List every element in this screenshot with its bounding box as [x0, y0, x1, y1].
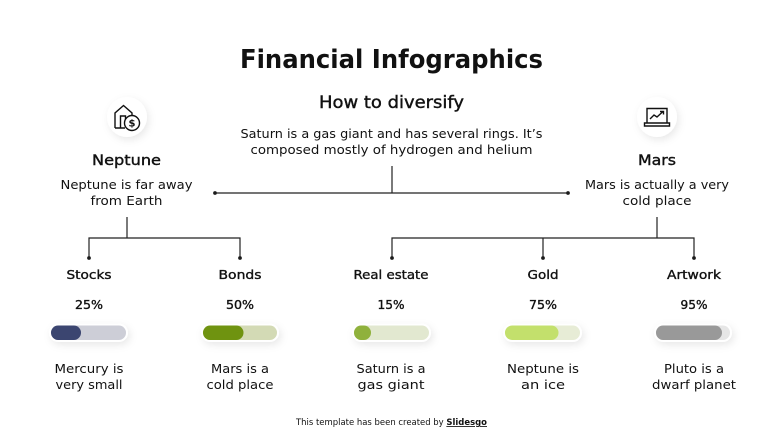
- credit line: This template has been created by Slidesgo: [295, 418, 487, 428]
- text: saturn description: composed mostly of hydrogen and helium: [250, 143, 532, 157]
- value: 15%: 15%: [378, 298, 404, 312]
- text: mercury: very small: [56, 378, 122, 392]
- icon: laptop with chart: [637, 97, 677, 137]
- panel: neptune: [60, 97, 192, 208]
- connector: top tree: [214, 166, 569, 194]
- text: neptune description: [60, 178, 192, 208]
- text: pluto: [652, 362, 736, 392]
- text: mars: [206, 362, 274, 392]
- column: real estate: [352, 268, 431, 392]
- text: neptune: [507, 362, 579, 392]
- label: bonds: Bonds: [218, 268, 262, 282]
- column: bonds: [201, 268, 279, 392]
- heading: mars: Mars: [638, 153, 676, 169]
- heading: neptune: Neptune: [92, 153, 161, 169]
- text: mars description: Mars is actually a very: [585, 178, 729, 192]
- text: saturn: gas giant: [358, 378, 425, 392]
- value: 75%: 75%: [529, 298, 557, 312]
- text: saturn: Saturn is a: [356, 362, 426, 376]
- column: artwork: [652, 268, 736, 392]
- text: saturn description: Saturn is a gas giant and has several rings. It’s: [240, 127, 542, 141]
- icon: house with dollar: $: [129, 118, 136, 130]
- column: stocks: [49, 268, 128, 392]
- text: neptune: Neptune is: [507, 362, 579, 376]
- panel: how to diversify: [240, 93, 542, 157]
- progress bar: 95%: [654, 324, 732, 342]
- title: Financial Infographics: [240, 45, 543, 75]
- value: 50%: 50%: [226, 298, 254, 312]
- label: gold: Gold: [528, 268, 558, 282]
- text: mercury: [54, 362, 124, 392]
- text: neptune description: Neptune is far away: [60, 178, 192, 192]
- value: 95%: 95%: [680, 298, 708, 312]
- text: mars: cold place: [206, 378, 274, 392]
- text: mars description: [585, 178, 729, 208]
- heading: how to diversify: How to diversify: [319, 93, 464, 112]
- column: gold: [503, 268, 582, 392]
- label: stocks: Stocks: [66, 268, 112, 282]
- label: real estate: Real estate: [354, 268, 428, 282]
- label: artwork: Artwork: [667, 268, 721, 282]
- text: mars: Mars is a: [211, 362, 269, 376]
- text: mars description: cold place: [622, 194, 692, 208]
- text: saturn: [356, 362, 426, 392]
- progress bar: 15%: [352, 324, 431, 342]
- progress bar: 50%: [201, 324, 279, 342]
- text: pluto: Pluto is a: [664, 362, 724, 376]
- text: neptune: an ice: [521, 378, 565, 392]
- progress bar: 25%: [49, 324, 128, 342]
- value: 25%: 25%: [75, 298, 103, 312]
- text: pluto: dwarf planet: [652, 378, 736, 392]
- connector: left tree: [88, 217, 241, 259]
- progress bar: 75%: [503, 324, 582, 342]
- text: mercury: Mercury is: [54, 362, 124, 376]
- text: saturn description: [240, 127, 542, 157]
- connector: right tree: [391, 217, 695, 259]
- text: neptune description: from Earth: [90, 194, 162, 208]
- panel: mars: [585, 97, 729, 208]
